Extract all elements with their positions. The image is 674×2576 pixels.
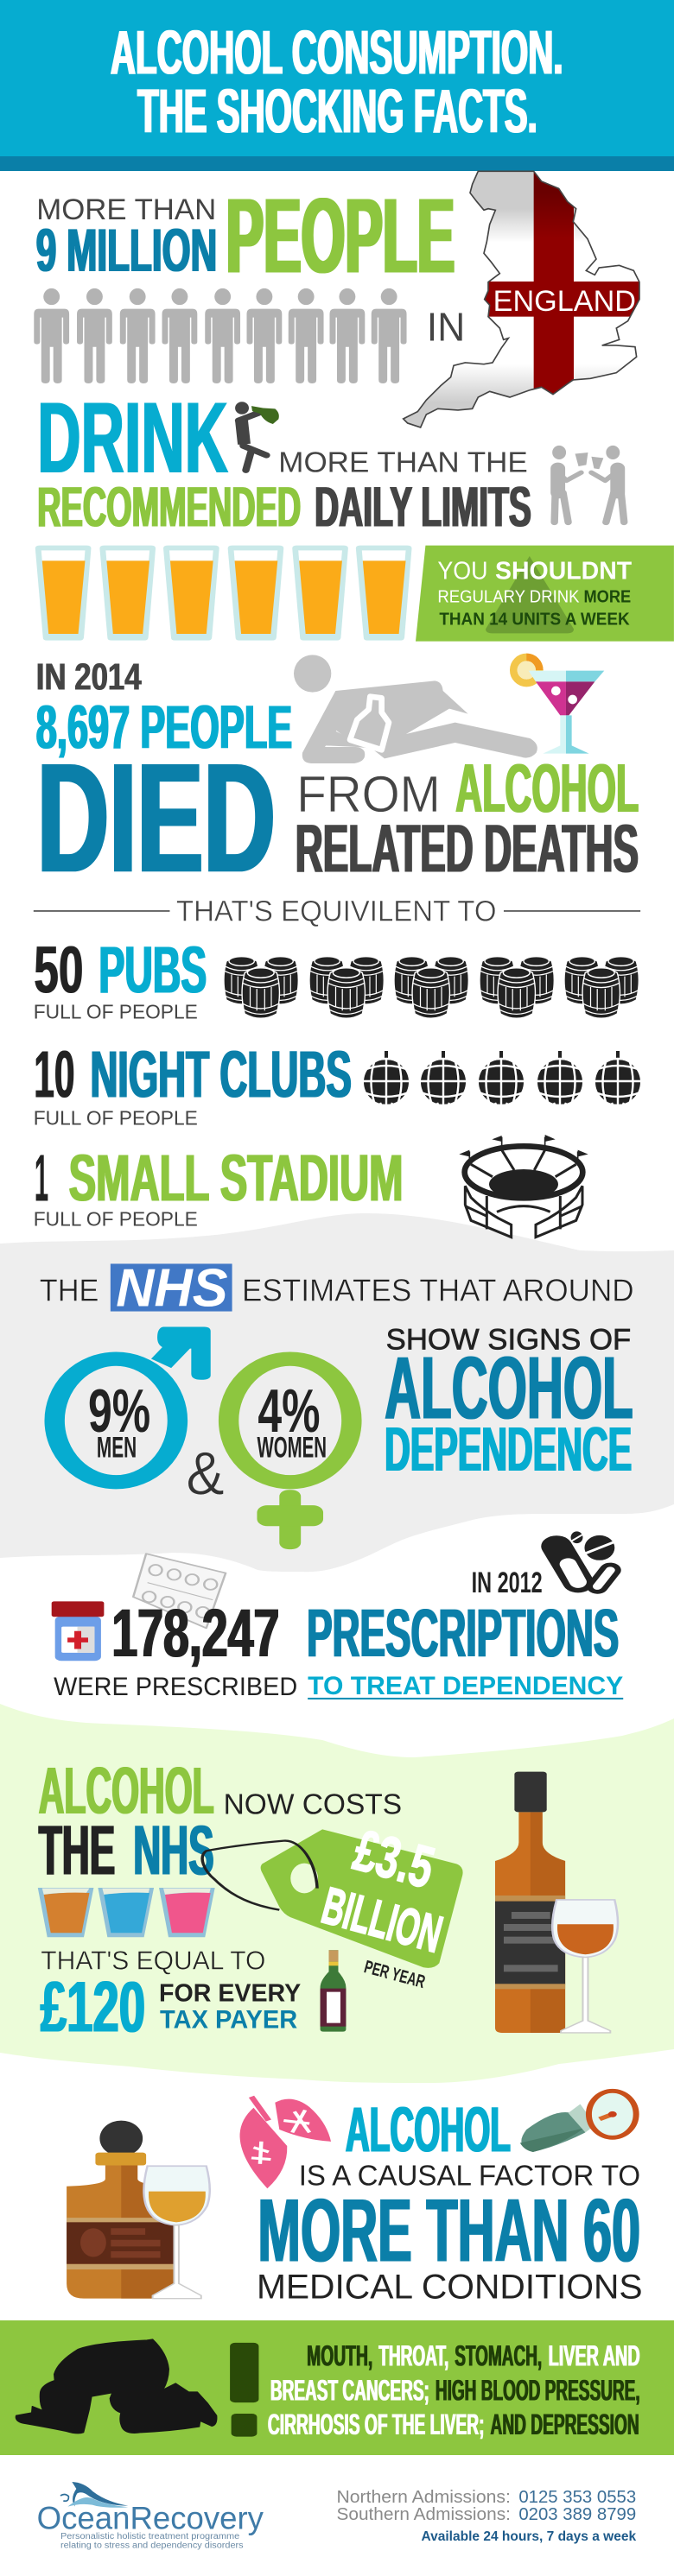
icon: white wine glass: [143, 2166, 210, 2299]
panel: grey wave background: [0, 1213, 674, 1572]
text: the NHS: THE: [39, 1811, 115, 1889]
text: that's equal to: THAT'S EQUAL TO: [41, 1946, 265, 1976]
logo: NHS: NHS: [116, 1258, 228, 1318]
logo: NHS: [111, 1258, 232, 1318]
text: now costs: NOW COSTS: [224, 1788, 402, 1820]
panel: NHS estimates: 178,247: [111, 1594, 279, 1671]
panel: cost to NHS: [38, 1753, 618, 2048]
text: were prescribed: WERE PRESCRIBED: [54, 1672, 297, 1700]
icon: wine glass: [552, 1900, 618, 2033]
icon: whisky bottle: [495, 1772, 565, 2033]
panel: cost to NHS: ALCOHOL: [39, 1753, 214, 1828]
icon: cocktail glass: [513, 657, 604, 754]
panel: more than 9 million people in England: [34, 175, 624, 539]
icon: England map with St George cross: [389, 170, 648, 429]
contact details: [336, 2487, 636, 2544]
panel: cost to NHS: NHS: [133, 1811, 214, 1889]
text: in: IN: [427, 306, 465, 350]
icon: blood pressure pump: [520, 2091, 636, 2152]
panel: recommended units: DIED: [37, 731, 276, 905]
icon: row of nine people: [34, 288, 407, 383]
text: more than: MORE THAN: [36, 193, 216, 226]
panel: cost to NHS: £120: [41, 1967, 145, 2048]
text: the: THE: [40, 1274, 99, 1308]
text: 50 pubs: 50: [34, 933, 83, 1007]
text: 1 small stadium: FULL OF PEOPLE: [34, 1209, 198, 1231]
text: 10 night clubs: FULL OF PEOPLE: [34, 1108, 198, 1130]
panel: NHS estimates: [40, 1258, 634, 1700]
text: more than the: MORE THAN THE: [278, 446, 528, 478]
text: billion on tag: BILLION: [316, 1877, 448, 1964]
icon: male symbol 9% men: 9%: [88, 1377, 150, 1445]
text: 50 pubs: FULL OF PEOPLE: [34, 1002, 198, 1023]
icon: six pints of beer: [35, 546, 412, 641]
icon: disco balls: [362, 1051, 642, 1108]
panel: NHS estimates: IN 2012: [472, 1566, 543, 1599]
panel: recommended units: [34, 546, 674, 927]
icon: amber bottle: [67, 2121, 174, 2299]
panel: recommended units: 8,697 PEOPLE: [36, 693, 292, 762]
text: conditions list: BREAST CANCERS;: [270, 2374, 429, 2407]
panel: light green wave background: [0, 1704, 674, 2083]
panel: more than 9 million people in England: DRINK: [37, 381, 228, 494]
panel: more than 9 million people in England: 9 MILLION: [36, 216, 217, 284]
icon: string and price tag: [202, 1829, 463, 1968]
icon: exclamation mark: [230, 2343, 258, 2437]
text: 50 pubs: [34, 933, 207, 1023]
callout: weekly limit: MORE: [583, 587, 631, 606]
icon: male symbol 9% men: MEN: [97, 1431, 137, 1464]
panel: header banner: [0, 0, 674, 171]
icon: stadium: [459, 1135, 588, 1237]
icon: male symbol 9% men: [54, 1326, 211, 1482]
text: per year: PER YEAR: [362, 1957, 427, 1992]
text: from: FROM: [296, 765, 441, 823]
text: for every: FOR EVERY: [159, 1978, 301, 2007]
icon: female symbol 4% women: WOMEN: [257, 1431, 327, 1464]
logo: Ocean Recovery: [37, 2482, 264, 2551]
icon: female symbol 4% women: [229, 1359, 352, 1549]
contact details: Northern Admissions:: [336, 2487, 511, 2507]
icon: three tumblers: [38, 1888, 215, 1937]
icon: female symbol 4% women: 4%: [258, 1377, 321, 1445]
heading: that's equivalent to: THAT'S EQUIVILENT TO: [176, 896, 496, 927]
label: england: ENGLAND: [493, 285, 636, 318]
text: 1 small stadium: 1: [35, 1141, 48, 1215]
panel: medical conditions: [67, 2091, 643, 2307]
group: exclamation and conditions list: [230, 2339, 640, 2441]
text: conditions list: THROAT,: [378, 2339, 448, 2373]
text: £3.5 on tag: £3.5: [347, 1817, 441, 1901]
panel: equivalents: [34, 933, 404, 1231]
text: tax payer: TAX PAYER: [160, 2005, 297, 2034]
text: ampersand: &: [186, 1439, 225, 1508]
callout: weekly limit: YOU: [437, 557, 488, 585]
icon: pills: [556, 1531, 614, 1586]
text: 10 night clubs: [34, 1037, 352, 1130]
text: conditions list: MOUTH,: [307, 2339, 372, 2373]
callout: weekly limit: [416, 546, 674, 642]
icon: small wine bottle: [321, 1950, 346, 2032]
icon: medicine jar: [52, 1601, 104, 1661]
panel: green conditions band: [0, 2320, 674, 2455]
icon: kneeling person silhouette: [16, 2339, 217, 2434]
icon: beer barrels: [224, 957, 639, 1018]
logo: Ocean Recovery: OceanRecovery: [37, 2499, 264, 2535]
logo: Ocean Recovery: Personalistic holistic treatment programme: [60, 2532, 240, 2541]
panel: more than 9 million people in England: RECOMMENDED: [37, 474, 301, 539]
text: 1 small stadium: [34, 1141, 404, 1231]
text: 10 night clubs: 10: [34, 1037, 75, 1111]
icon: lungs: [240, 2097, 331, 2188]
icon: collapsed person with bottle: [294, 655, 537, 763]
panel: equivalents: PUBS: [99, 933, 207, 1007]
icon: man drinking from bottle: [235, 402, 279, 470]
logo: Ocean Recovery: relating to stress and dependency disorders: [60, 2541, 244, 2551]
text: conditions list: [268, 2339, 640, 2441]
callout: weekly limit: REGULARY DRINK: [437, 587, 580, 606]
icon: blister pack: [133, 1554, 226, 1628]
text: in 2014: IN 2014: [36, 655, 142, 698]
icon: two people cheering: [552, 446, 624, 522]
contact details: Southern Admissions:: [336, 2504, 511, 2524]
